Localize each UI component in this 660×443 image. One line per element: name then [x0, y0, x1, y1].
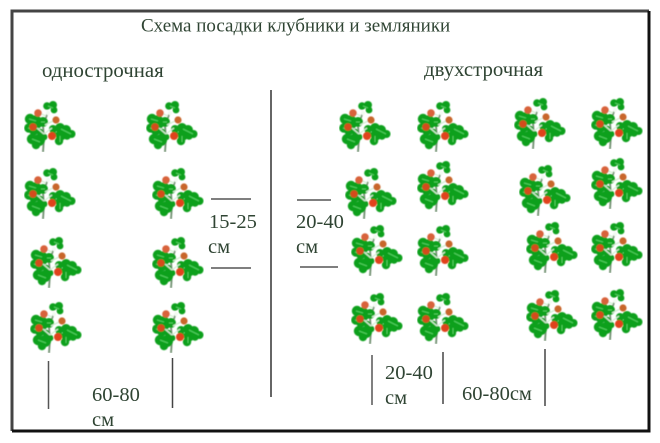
heading: double-row planting: двухстрочная — [424, 58, 544, 81]
title: Схема посадки клубники и земляники — [141, 16, 450, 36]
dimension: 20-40 cm between rows — [296, 200, 344, 267]
dimension: 60-80 cm double-row: 60-80см — [462, 383, 532, 405]
dimension: 20-40 cm between rows: см — [296, 236, 318, 258]
dimension: 60-80 cm single-row — [48, 358, 172, 431]
dimension: 20-40 cm double-row: см — [385, 387, 407, 409]
dimension: 15-25 cm — [208, 199, 257, 268]
dimension: 20-40 cm double-row: 20-40 — [385, 362, 433, 384]
dimension: 15-25 cm: см — [208, 236, 230, 258]
dimension: 60-80 cm double-row — [462, 349, 545, 406]
dimension: 60-80 cm single-row: 60-80 — [92, 384, 140, 406]
plants: single-row scheme — [24, 101, 204, 353]
center divider — [270, 90, 272, 397]
dimension: 15-25 cm: 15-25 — [209, 211, 257, 233]
heading: single-row planting: однострочная — [42, 59, 164, 82]
dimension: 20-40 cm double-row — [372, 352, 443, 409]
dimension: 60-80 cm single-row: см — [92, 409, 114, 431]
dimension: 20-40 cm between rows: 20-40 — [296, 211, 344, 233]
plants: double-row scheme — [339, 98, 642, 344]
